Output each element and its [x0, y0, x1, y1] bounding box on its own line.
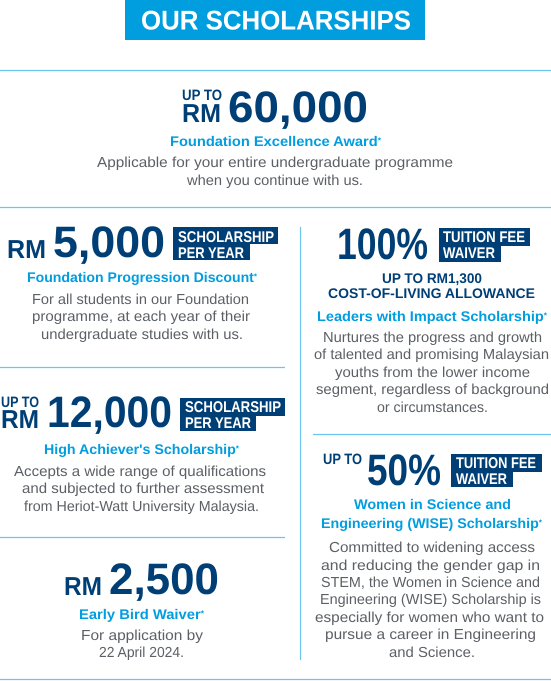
panel: Early Bird Waiver	[64, 555, 219, 661]
description: from Heriot-Watt University Malaysia.	[24, 499, 259, 515]
badge: tuition fee waiver: TUITION FEE	[456, 455, 536, 472]
scholarship name: Engineering (WISE) Scholarship	[321, 515, 535, 531]
scholarship name: *	[254, 272, 258, 281]
amount: up to RM 12,000: 12,000	[47, 388, 172, 437]
amount: up to RM 12,000: RM	[1, 404, 39, 434]
scholarship name: *	[236, 444, 240, 453]
description	[14, 464, 266, 515]
scholarship name: Early Bird Waiver	[79, 606, 194, 622]
scholarship name: Women in Science and	[354, 496, 511, 512]
badge: scholarship per year	[180, 398, 285, 432]
description: or circumstances.	[377, 400, 488, 416]
description: youths from the lower income	[335, 365, 530, 381]
allowance text	[328, 270, 535, 301]
scholarship name: Foundation Excellence Award	[170, 133, 368, 149]
description: when you continue with us.	[186, 173, 363, 189]
description: and reducing the gender gap in	[321, 558, 540, 574]
description: Nurtures the progress and growth	[323, 330, 542, 346]
description: and Science.	[389, 645, 475, 661]
allowance text: UP TO RM1,300	[382, 270, 482, 286]
scholarship name: High Achiever's Scholarship	[44, 441, 233, 457]
description: Engineering (WISE) Scholarship is	[320, 592, 541, 608]
description: of talented and promising Malaysian	[314, 347, 549, 363]
badge: scholarship per year: PER YEAR	[185, 415, 251, 432]
description: STEM, the Women in Science and	[321, 575, 540, 591]
title banner: OUR SCHOLARSHIPS	[141, 6, 411, 36]
description	[32, 292, 250, 343]
description: segment, regardless of background	[316, 382, 549, 398]
amount: up to RM 12,000: UP TO	[1, 394, 39, 411]
scholarship name	[321, 496, 543, 531]
description: For application by	[81, 628, 204, 644]
panel: High Achiever's Scholarship	[1, 388, 285, 515]
scholarship name: Foundation Progression Discount	[27, 269, 253, 285]
amount: RM 5,000: RM	[7, 234, 46, 264]
amount: up to RM 60,000: 60,000	[228, 83, 368, 132]
badge: tuition fee waiver	[451, 454, 542, 488]
badge: scholarship per year: SCHOLARSHIP	[178, 229, 274, 246]
amount: RM 2,500: 2,500	[109, 555, 219, 604]
allowance text: COST-OF-LIVING ALLOWANCE	[328, 285, 535, 301]
badge: tuition fee waiver: WAIVER	[456, 471, 507, 488]
amount: 100%: 100%	[337, 220, 428, 269]
description: especially for women who want to	[315, 610, 544, 626]
panel: Foundation Excellence Award	[97, 83, 453, 189]
amount: up to RM 12,000	[1, 388, 172, 437]
amount: up to RM 60,000: UP TO	[182, 87, 222, 104]
description: Accepts a wide range of qualifications	[14, 464, 266, 480]
amount: RM 5,000: 5,000	[53, 218, 165, 267]
description: programme, at each year of their	[32, 309, 250, 325]
scholarship name: *	[201, 609, 205, 618]
amount: up to 50%: UP TO	[323, 451, 362, 468]
badge: tuition fee waiver	[439, 228, 530, 262]
scholarship name: *	[544, 311, 548, 320]
description: 22 April 2024.	[99, 645, 184, 661]
scholarship name: *	[539, 518, 543, 527]
scholarship name: *	[378, 136, 382, 145]
description	[97, 155, 453, 189]
description	[81, 628, 204, 661]
badge: tuition fee waiver: TUITION FEE	[443, 229, 525, 246]
description: undergraduate studies with us.	[41, 327, 243, 343]
panel: Leaders with Impact Scholarship	[314, 220, 549, 416]
badge: scholarship per year: SCHOLARSHIP	[185, 399, 281, 416]
description: Committed to widening access	[329, 540, 535, 556]
amount: RM 2,500: RM	[64, 571, 102, 601]
badge: scholarship per year	[173, 227, 278, 262]
scholarship name: Leaders with Impact Scholarship	[317, 308, 536, 324]
description: pursue a career in Engineering	[325, 627, 536, 643]
description: For all students in our Foundation	[32, 292, 249, 308]
panel: Women in Science and Engineering Scholarship	[315, 446, 544, 661]
description	[314, 330, 549, 416]
description	[315, 540, 544, 661]
badge: scholarship per year: PER YEAR	[178, 245, 244, 262]
panel: Foundation Progression Discount	[7, 218, 278, 343]
amount: RM 5,000	[7, 218, 165, 267]
amount: up to RM 60,000: RM	[182, 98, 221, 128]
badge: tuition fee waiver: WAIVER	[443, 245, 495, 262]
amount: up to 50%: 50%	[367, 446, 441, 495]
description: Applicable for your entire undergraduate programme	[97, 155, 453, 171]
amount: up to 50%	[323, 446, 441, 495]
description: and subjected to further assessment	[22, 481, 264, 497]
